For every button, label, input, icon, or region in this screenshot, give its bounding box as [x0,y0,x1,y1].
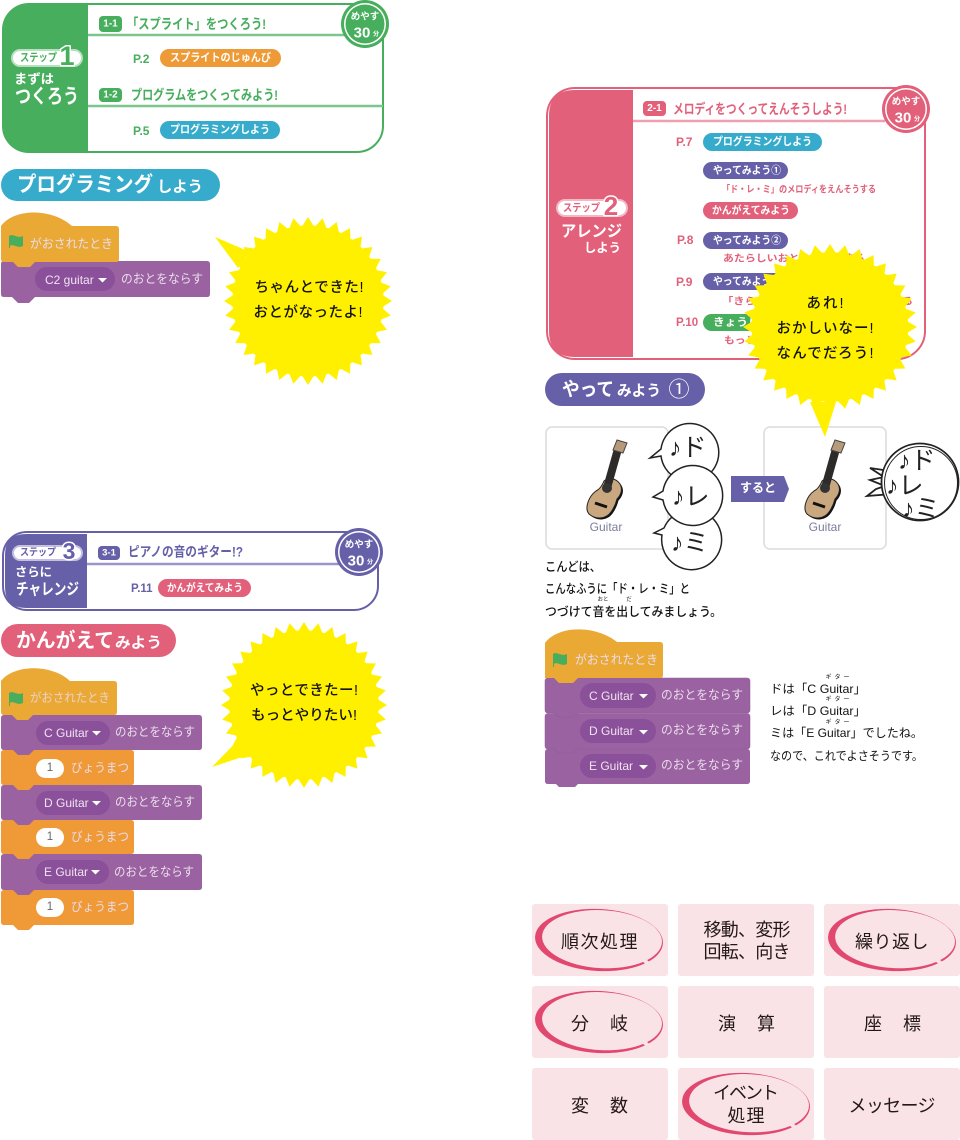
heading pill: やってみよう①: みよう [617,382,661,400]
time badge: めやす [351,12,379,22]
cell: 分岐: 岐 [610,1014,628,1034]
heading pill: かんがえてみよう [1,624,176,657]
time badge [882,85,930,133]
heading pill: プログラミングしよう [1,169,220,201]
heading 1-2: 1-2 [103,90,118,100]
step 3 label: 3 [63,538,75,564]
heading pill: プログラミングしよう: しよう [157,178,203,196]
text: ギターの対応: ギター [825,695,853,703]
cell: メッセージ: メッセージ [848,1096,936,1116]
link かんがえてみよう: かんがえてみよう [712,204,790,216]
heading 3-1 [98,544,243,560]
time badge: 30 [348,552,364,570]
time badge: 分 [367,558,373,566]
time badge: めやす [345,540,373,550]
heading 1-2 [99,87,278,103]
page link P.11 [131,579,251,597]
step 3 label: ステップ [20,546,56,558]
code blocks: ギター3音と待ち [1,668,202,930]
step 3 label: チャレンジ [16,580,79,598]
page link P.11: P.11 [131,583,153,595]
speech bubble: ドレミ: ♪ミ [902,495,940,523]
heading 3-1: ピアノの音のギター!? [128,544,243,560]
speech bubble: ドレミ [867,444,958,523]
sprite card: after: Guitar [809,520,841,534]
cell: 移動、変形 回転、向き [678,904,814,976]
link やってみよう①: 「ド・レ・ミ」のメロディをえんそうする [722,184,876,196]
code blocks: ギター3音と待ち: 1 [47,831,53,843]
heading pill: やってみよう①: やって [562,378,614,400]
heading 1-2: プログラムをつくってみよう! [131,87,278,103]
code blocks: ギター3音と待ち: D Guitar [44,796,89,810]
heading pill: かんがえてみよう: かんがえて [16,628,114,652]
text: 説明文: おと [597,596,609,603]
panel: step 3 [3,528,383,610]
speech bubble: レ [653,465,723,526]
link P.9: P.9 [676,275,693,289]
time badge: めやす [892,96,920,108]
link やってみよう①: やってみよう① [713,164,781,176]
time badge: 30 [354,24,370,42]
cell: 演算: 算 [757,1014,775,1034]
step 1 label: つくろう [15,86,79,108]
speech bubble: レ: ♪レ [672,483,710,511]
cell: 変数 [532,1068,668,1140]
page link P.2: P.2 [133,52,150,66]
heading 2-1 [643,101,847,117]
time badge [335,528,383,576]
cell: 分岐: 分 [571,1014,589,1034]
cell: イベント処理: 処理 [728,1106,764,1126]
page link P.11: かんがえてみよう [167,581,243,594]
link P.10: きょうりょく [713,316,783,328]
link かんがえてみよう [703,202,798,219]
icon: guitar [587,440,627,519]
step 3 label: さらに [15,565,52,579]
link P.10: P.10 [676,317,698,329]
heading pill: プログラミングしよう: プログラミング [17,172,153,196]
cell: 順次処理 [532,904,668,976]
step 1 label: まずは [14,72,54,86]
speech bubble: ド: ♪ド [669,434,707,462]
code blocks: ドレミ: がおされたとき [575,652,658,667]
text: ギターの対応: ドは「C Guitar」 [770,682,866,696]
code blocks: ギター3音と待ち: 1 [47,901,53,913]
code blocks: ギター3音と待ち: E Guitar [44,865,88,879]
sprite card: after [764,427,886,549]
code blocks: ギター3音と待ち: 1 [47,762,53,774]
cell: 座標: 標 [903,1014,921,1034]
text: 説明文: だ [626,596,632,603]
cell: 移動、変形 回転、向き: 移動、変形 [704,920,790,940]
callout: やっとできたー: もっとやりたい! [251,707,357,724]
step 2 label: しよう [584,241,621,255]
text: ギターの対応: ギター [825,718,853,726]
code blocks: ドレミ: C Guitar [589,689,634,703]
heading pill: やってみよう①: ① [668,378,690,402]
text: 説明文: つづけて音を出してみましょう。 [545,604,722,619]
code blocks: ドレミ: のおとをならす [661,723,743,737]
code blocks: ドレミ: E Guitar [589,759,633,773]
text: 説明文: こんなふうに「ド・レ・ミ」と [545,582,690,596]
code blocks: ギター3音と待ち: びょうまつ [71,900,129,914]
callout: あれ!おかしいなー!: あれ! [806,295,844,312]
code blocks: ドレミ: のおとをならす [661,758,743,772]
heading pill: やってみよう① [545,373,705,406]
code blocks: ギター3音と待ち: びょうまつ [71,761,129,775]
link P.8: やってみよう② [713,234,781,246]
panel: step 2 [547,85,930,359]
step 1 label: 1 [59,41,75,71]
heading 2-1: メロディをつくってえんそうしよう! [673,101,847,117]
callout: やっとできたー: やっとできたー! [250,682,358,699]
sprite card: before: Guitar [590,520,622,534]
speech bubble: ド [650,424,719,482]
icon: guitar [805,440,845,519]
speech bubble: ドレミ: ♪ド [898,447,936,475]
concept grid [532,904,960,1140]
time badge: 分 [914,115,920,123]
link P.9: やってみよう③ [713,276,781,288]
heading 3-1: 3-1 [102,548,117,558]
step 1 label: ステップ [20,51,57,64]
step 3 label [13,538,82,598]
callout: ちゃんとできた: おとがなったよ! [254,303,362,321]
link P.10: もっとたくさんのおとをならしてみる [724,336,907,346]
link P.7: プログラミングしよう [713,134,812,148]
callout: ちゃんとできた: ちゃんとできた! [254,279,364,296]
link P.8: P.8 [677,233,694,247]
text: ギターの対応: レは「D Guitar」 [770,704,866,718]
code blocks: ドレミ: のおとをならす [661,688,743,702]
heading 1-1: 1-1 [103,18,118,30]
page link P.2: スプライトのじゅんび [170,50,271,64]
page link P.5: P.5 [133,124,150,138]
heading 2-1: 2-1 [647,103,662,114]
callout: あれ!おかしいなー!: なんでだろう! [776,345,874,362]
panel: step 1 [3,0,389,152]
step 1 label [12,41,82,108]
link P.10 [676,314,907,346]
step 2 label: ステップ [563,202,600,214]
page link P.2 [133,49,281,67]
cell: 座標: 座 [864,1014,882,1034]
speech bubble: ドレミ: ♪レ [886,472,924,500]
code blocks: ギター3音と待ち: のおとをならす [115,795,195,809]
code blocks: C2 guitar: のおとをならす [121,272,203,286]
code blocks: C2 guitar [1,212,210,303]
step 2 label [557,191,627,255]
icon: green flag [9,235,23,248]
step 2 label: アレンジ [561,224,622,240]
code blocks: C2 guitar: がおされたとき [30,236,113,251]
page link P.5: プログラミングしよう [170,122,270,136]
text: ギターの対応 [770,673,923,763]
cell: イベント処理: イベント [713,1083,779,1103]
speech bubble: ミ: ♪ミ [671,529,709,557]
cell: 分岐 [532,986,668,1058]
arrow: すると [731,476,789,502]
heading 1-1 [99,16,266,32]
cell: 変数: 数 [610,1096,628,1116]
text: ギターの対応: なので、これでよさそうです。 [770,749,923,763]
time badge: 分 [373,30,379,38]
callout: やっとできたー [212,622,387,788]
cell: イベント処理 [678,1068,814,1140]
icon: green flag [553,653,567,667]
callout: あれ!おかしいなー! [743,244,917,437]
cell: 順次処理: 順次処理 [561,932,639,952]
arrow: すると: すると [740,481,776,495]
cell: 演算: 演 [718,1014,736,1034]
step 2 label: 2 [604,191,618,221]
cell: 移動、変形 回転、向き: 回転、向き [704,942,790,962]
link やってみよう① [703,162,876,196]
heading 1-1: 「スプライト」をつくろう! [127,16,266,32]
text: 説明文 [545,560,722,619]
callout: ちゃんとできた [215,217,392,385]
cell: メッセージ [824,1068,960,1140]
heading pill: かんがえてみよう: みよう [115,634,162,652]
cell: 変数: 変 [571,1096,589,1116]
link P.8: あたらしいおとをついかする [723,254,865,264]
link P.7: P.7 [676,135,693,149]
code blocks: C2 guitar: C2 guitar [45,273,94,287]
callout: あれ!おかしいなー!: おかしいなー! [776,320,874,337]
icon: green flag [9,692,23,706]
code blocks: ギター3音と待ち: C Guitar [44,726,89,740]
text: ギターの対応: ミは「E Guitar」でしたね。 [770,726,923,740]
cell: 繰り返し: 繰り返し [855,932,929,952]
code blocks: ギター3音と待ち: のおとをならす [114,865,194,879]
code blocks: ギター3音と待ち: がおされたとき [30,690,110,705]
link P.8 [677,232,865,264]
text: 説明文: こんどは、 [545,560,601,574]
speech bubble: ミ [654,510,722,570]
cell: 繰り返し [824,904,960,976]
code blocks: ギター3音と待ち: のおとをならす [115,725,195,739]
code blocks: ドレミ [545,629,750,787]
link P.9: 「きらきらぼし」のメロディをつくる [722,296,913,308]
link P.7 [676,133,822,151]
code blocks: ギター3音と待ち: びょうまつ [71,830,129,844]
code blocks: ドレミ: D Guitar [589,724,634,738]
cell: 座標 [824,986,960,1058]
link P.9 [676,273,913,308]
time badge: 30 [895,110,911,126]
cell: 演算 [678,986,814,1058]
sprite card: before [546,427,668,549]
text: ギターの対応: ギター [825,673,853,681]
page link P.5 [133,121,280,139]
time badge [341,0,389,48]
